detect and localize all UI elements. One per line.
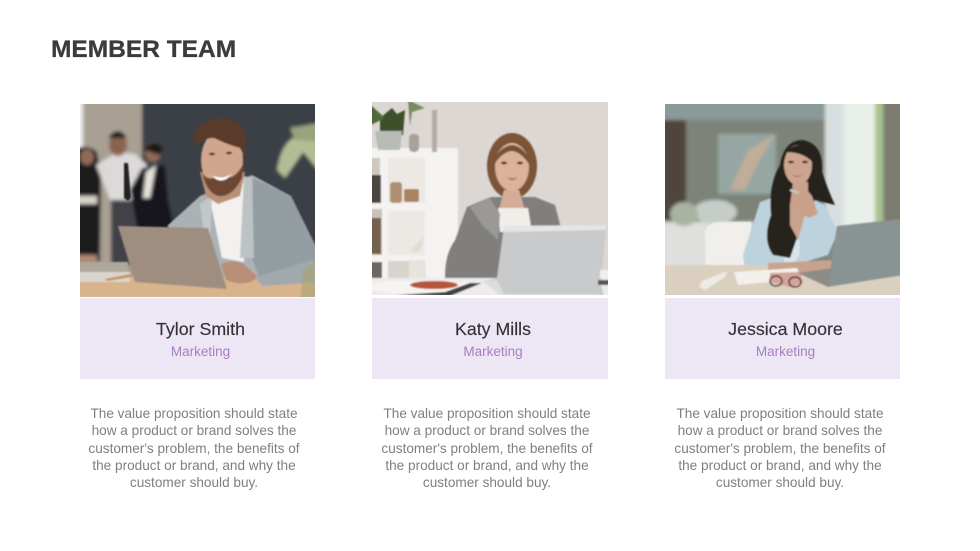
name band	[372, 298, 608, 379]
title: MEMBER TEAM	[51, 36, 236, 63]
description: customer's problem, the benefits of	[381, 441, 593, 456]
description: the product or brand, and why the	[678, 458, 882, 473]
description: the product or brand, and why the	[385, 458, 589, 473]
name band	[665, 298, 900, 379]
panel: Jessica Moore	[665, 104, 900, 490]
description	[381, 406, 593, 490]
description	[88, 406, 300, 490]
description: customer should buy.	[423, 475, 551, 490]
description: how a product or brand solves the	[678, 423, 882, 438]
description: the product or brand, and why the	[92, 458, 296, 473]
description: The value proposition should state	[383, 406, 591, 421]
description: customer should buy.	[716, 475, 844, 490]
photo: woman with long dark hair	[665, 104, 900, 295]
name: Jessica Moore	[728, 319, 843, 339]
name: Tylor Smith	[156, 319, 245, 339]
name: Katy Mills	[455, 319, 531, 339]
panel: Tylor Smith	[80, 104, 315, 490]
role: Marketing	[171, 344, 230, 359]
description	[674, 406, 886, 490]
description: customer should buy.	[130, 475, 258, 490]
description: how a product or brand solves the	[92, 423, 296, 438]
panel: Katy Mills	[372, 102, 608, 490]
photo: man with laptop	[80, 104, 315, 297]
role: Marketing	[463, 344, 523, 359]
description: how a product or brand solves the	[385, 423, 589, 438]
description: customer's problem, the benefits of	[88, 441, 300, 456]
role: Marketing	[756, 344, 815, 359]
description: The value proposition should state	[90, 406, 298, 421]
description: customer's problem, the benefits of	[674, 441, 886, 456]
description: The value proposition should state	[676, 406, 884, 421]
photo: woman in plaid blazer	[372, 102, 608, 295]
name band	[80, 298, 315, 379]
